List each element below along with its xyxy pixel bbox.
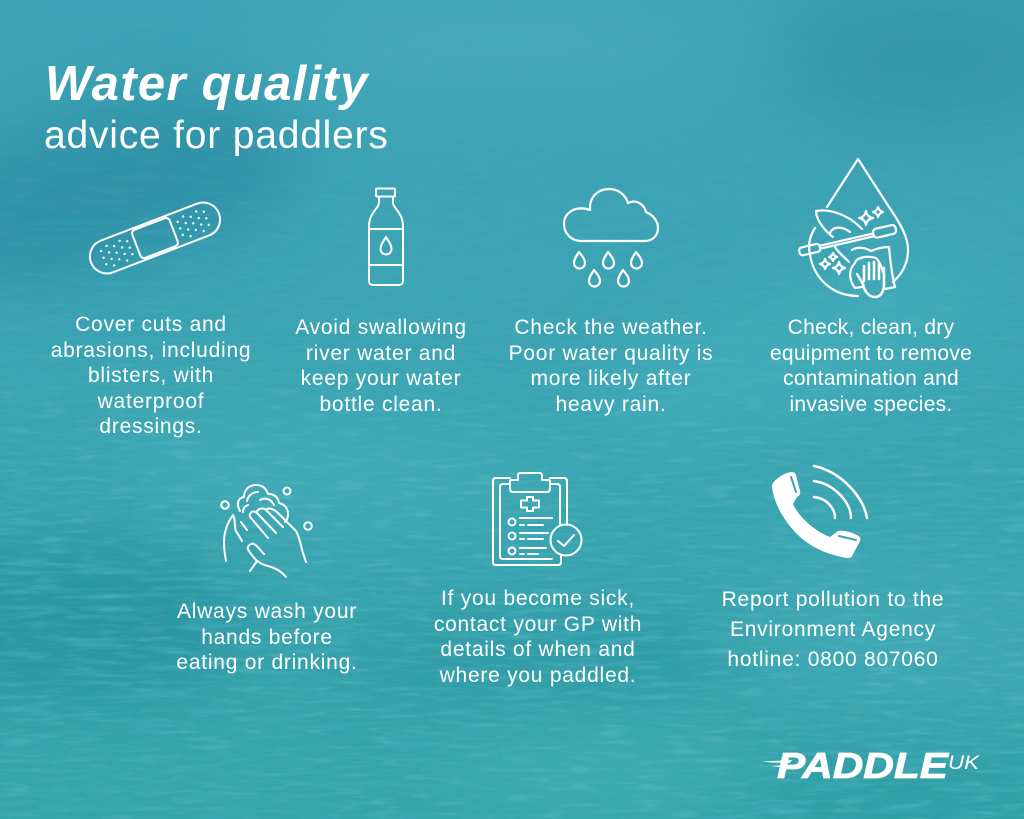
logo: Paddle UK: PADDLE <box>777 745 949 786</box>
text: check clean dry: Check, clean, dry <box>788 316 954 339</box>
text: if you become sick: where you paddled. <box>440 664 636 686</box>
sparkles <box>859 211 873 225</box>
text: if you become sick <box>434 587 642 686</box>
text: wash hands: hands before <box>201 626 333 648</box>
text: avoid swallowing: bottle clean. <box>320 392 442 416</box>
text: report pollution: hotline: 0800 807060 <box>727 648 939 671</box>
text: avoid swallowing <box>295 316 467 416</box>
text: cover cuts: blisters, with <box>88 364 214 387</box>
text: wash hands: Always wash your <box>177 600 357 623</box>
title: Water quality <box>45 57 369 111</box>
text: check the weather: more likely after <box>531 367 691 390</box>
text: cover cuts: abrasions, including <box>51 338 251 362</box>
paddle <box>798 224 897 256</box>
text: report pollution: Environment Agency <box>730 618 936 641</box>
text: cover cuts: waterproof <box>98 390 204 412</box>
text: cover cuts <box>51 313 251 438</box>
text: check the weather: heavy rain. <box>556 392 666 416</box>
text: check the weather <box>509 316 713 416</box>
title: advice for paddlers <box>44 114 389 157</box>
text: check clean dry: equipment to remove <box>770 342 972 364</box>
text: if you become sick: contact your GP with <box>434 612 642 636</box>
text: if you become sick: details of when and <box>440 638 636 661</box>
text: check clean dry: invasive species. <box>790 392 952 416</box>
text: wash hands <box>176 600 358 674</box>
text: check the weather: Poor water quality is <box>509 342 713 364</box>
text: cover cuts: Cover cuts and <box>75 313 227 336</box>
text: check clean dry: contamination and <box>783 367 959 390</box>
text: report pollution: Report pollution to the <box>722 588 944 611</box>
text: report pollution <box>722 588 944 671</box>
text: wash hands: eating or drinking. <box>176 651 358 674</box>
text: avoid swallowing: Avoid swallowing <box>295 316 467 339</box>
text: check clean dry <box>770 316 972 416</box>
text: cover cuts: dressings. <box>99 415 203 438</box>
text: avoid swallowing: river water and <box>306 342 456 364</box>
text: avoid swallowing: keep your water <box>301 367 461 390</box>
logo: Paddle UK: UK <box>948 753 981 774</box>
title <box>44 57 389 157</box>
text: if you become sick: If you become sick, <box>441 587 635 610</box>
text: check the weather: Check the weather. <box>514 316 708 339</box>
